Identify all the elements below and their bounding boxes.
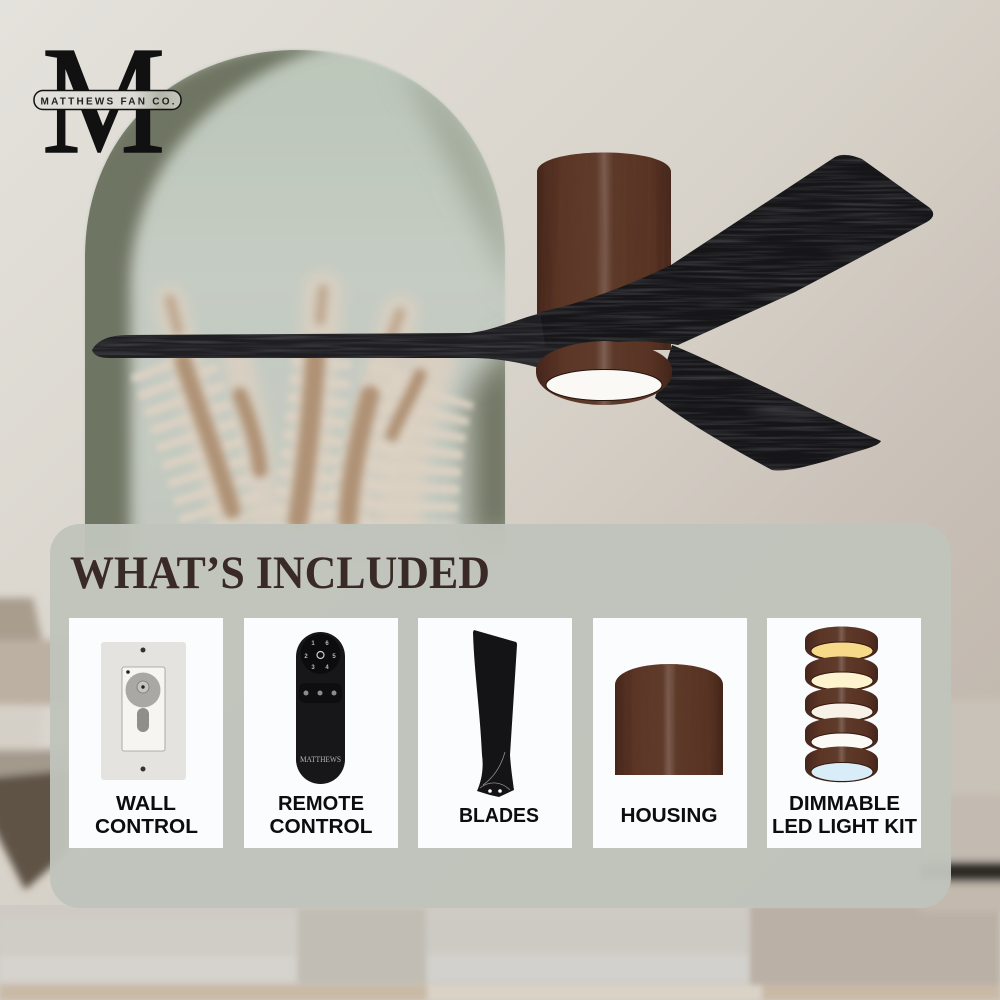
card: blades (418, 618, 572, 848)
icon: remote: 1 (311, 641, 315, 647)
card: housing (593, 618, 747, 848)
icon: wall plate (101, 642, 186, 780)
fan blade: upper right (540, 155, 933, 345)
icon: blade (473, 630, 517, 797)
label: REMOTE (278, 792, 364, 815)
led light (546, 370, 662, 400)
label: DIMMABLE (789, 792, 900, 815)
light kit ring (536, 341, 672, 405)
fan housing (537, 152, 671, 350)
label: BLADES (459, 804, 539, 827)
label: HOUSING (620, 804, 718, 827)
card: wall control (69, 618, 223, 848)
heading: WHAT’S INCLUDED (70, 547, 490, 599)
icon: remote: 4 (325, 665, 329, 671)
logo monogram: M (42, 14, 165, 186)
fan (92, 152, 933, 470)
icon: led discs (805, 626, 878, 782)
icon: remote: MATTHEWS (300, 755, 341, 764)
card: dimmable led light kit (767, 618, 921, 848)
icon: remote (296, 632, 345, 784)
sofa and pillows (0, 598, 1000, 912)
logo name: MATTHEWS FAN CO. (40, 96, 175, 108)
label: CONTROL (270, 815, 372, 838)
icon: remote: 3 (311, 665, 315, 671)
panel: what's included (50, 524, 951, 908)
icon: remote: 5 (332, 654, 336, 660)
fan blade: lower right (655, 345, 881, 470)
icon: housing (615, 664, 723, 775)
logo (34, 14, 181, 186)
label: LED LIGHT KIT (772, 815, 917, 838)
logo pill (34, 90, 181, 110)
pampas grass decoration (170, 290, 433, 525)
card: remote control (244, 618, 398, 848)
label: CONTROL (95, 815, 198, 838)
blade grain (92, 155, 933, 470)
fan blade: left (92, 312, 610, 368)
label: WALL (116, 792, 176, 815)
icon: remote: 6 (325, 641, 329, 647)
arch niche (84, 49, 506, 524)
icon: remote: 2 (304, 654, 308, 660)
